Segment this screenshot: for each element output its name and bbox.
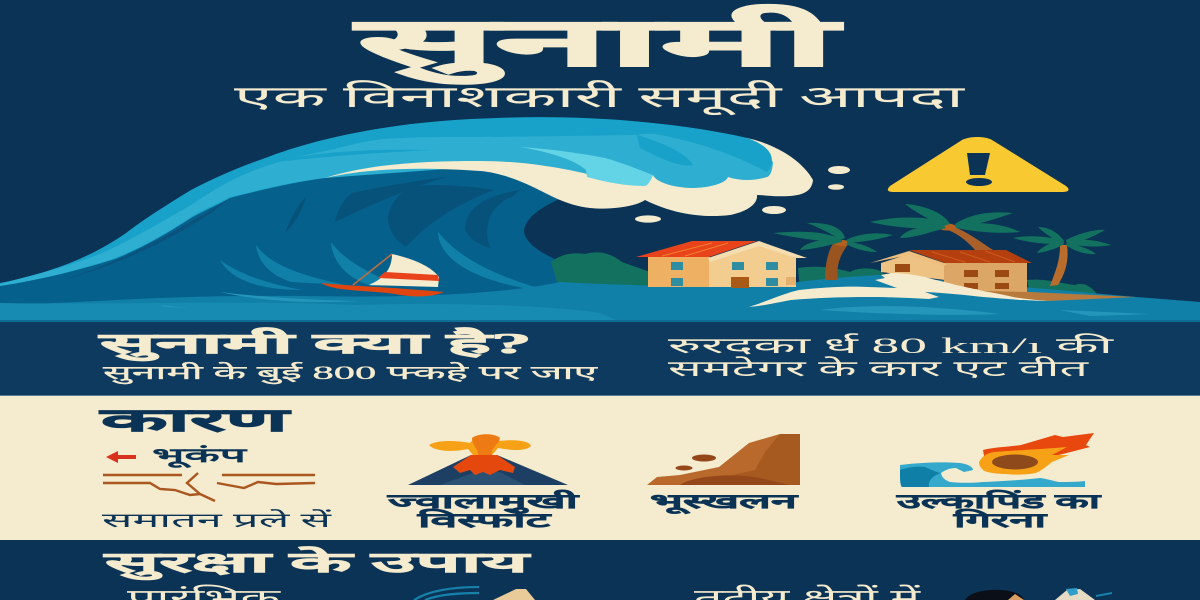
icon: warning triangle [888,137,1069,192]
sailboat [321,254,444,296]
palm tree 2 [870,204,1020,250]
cause: landslide [647,434,800,514]
crest blue lobes [480,134,773,188]
house 1 [636,241,807,288]
illustration: tsunami wave and coast [0,117,1200,322]
icon: warning tower [493,589,535,600]
heading: safety: सुरक्षा के उपाय [102,546,533,580]
description left: सुनामी के बुई 800 फ्कहे पर जाए [103,361,598,385]
cause: meteorite: उल्कापिंड का [895,489,1102,513]
sea [0,275,1200,322]
icon: signal waves [414,587,479,600]
house 2 [870,250,1032,293]
inner swirl shadows [285,177,520,250]
cause: meteorite: गिरना [952,508,1048,532]
cause: landslide: भूस्खलन [650,491,799,514]
title: सुनामी [352,4,844,84]
panel: safety measures [0,540,1200,600]
cause: volcano [386,434,580,532]
cause: volcano: ज्वालामुखी [386,489,580,514]
trees behind [551,252,1097,296]
subtitle: एक विनाशकारी समूदी आपदा [234,80,967,116]
crest foam [325,137,813,216]
heading: सुनामी क्या है? [97,327,532,361]
panel: what is a tsunami [0,322,1200,395]
heading: causes: कारण [98,402,293,438]
panel: causes [0,395,1200,541]
curl hollow [524,190,860,300]
description right line 2: समटेगर के कार एट वीत [668,356,1089,381]
cause: meteorite [895,433,1102,532]
cause: volcano: विस्फोट [416,508,552,532]
description right line 1: रुरदका र्ध 80 km/ı की [668,333,1114,358]
cause: earthquake [102,445,332,532]
icon: shelter [1055,588,1112,600]
cause: earthquake: समातन प्रले सें [102,509,332,532]
palm tree 3 [1013,227,1111,286]
icon: person [965,590,1024,600]
cause: earthquake: भूकंप [152,445,250,468]
wave body [0,117,747,320]
beach and foam [983,291,1136,301]
palm tree 1 [773,223,893,280]
spray droplets [828,166,850,174]
